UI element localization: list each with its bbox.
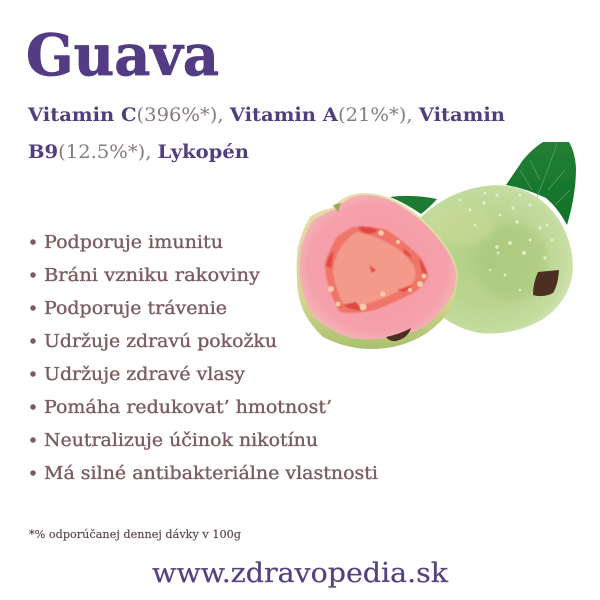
vitamins line 2: B9(12.5%*), Lykopén <box>28 141 249 163</box>
title: Guava <box>26 22 219 89</box>
vitamins line 1: Vitamin C(396%*), Vitamin A(21%*), Vitamin <box>27 104 505 126</box>
vitamins text block <box>27 104 505 163</box>
icon: whole guava <box>410 185 573 334</box>
icon: small leaf <box>390 196 437 214</box>
footnote: *% odporúčanej dennej dávky v 100g <box>29 528 241 541</box>
bullet 2: Bráni vzniku rakoviny <box>44 266 260 286</box>
bullet 7: Neutralizuje účinok nikotínu <box>44 431 318 451</box>
bullet 6: Pomáha redukovat’ hmotnost’ <box>44 398 332 418</box>
bullet 4: Udržuje zdravú pokožku <box>44 332 277 352</box>
red pulp patches <box>326 227 427 310</box>
icon: halved guava <box>297 193 458 349</box>
icon: blossom end <box>533 270 559 296</box>
benefits list <box>30 233 378 484</box>
blossom end of half <box>386 328 411 341</box>
bullet 1: Podporuje imunitu <box>44 233 223 253</box>
illustration: guava fruit <box>297 142 576 349</box>
seed cavity <box>325 227 428 313</box>
website url: www.zdravopedia.sk <box>152 558 449 589</box>
bullet 8: Má silné antibakteriálne vlastnosti <box>44 464 378 484</box>
bullet 5: Udržuje zdravé vlasy <box>44 365 245 385</box>
stem mark <box>333 203 341 212</box>
icon: large leaf <box>506 142 576 225</box>
bullet 3: Podporuje trávenie <box>44 299 227 319</box>
